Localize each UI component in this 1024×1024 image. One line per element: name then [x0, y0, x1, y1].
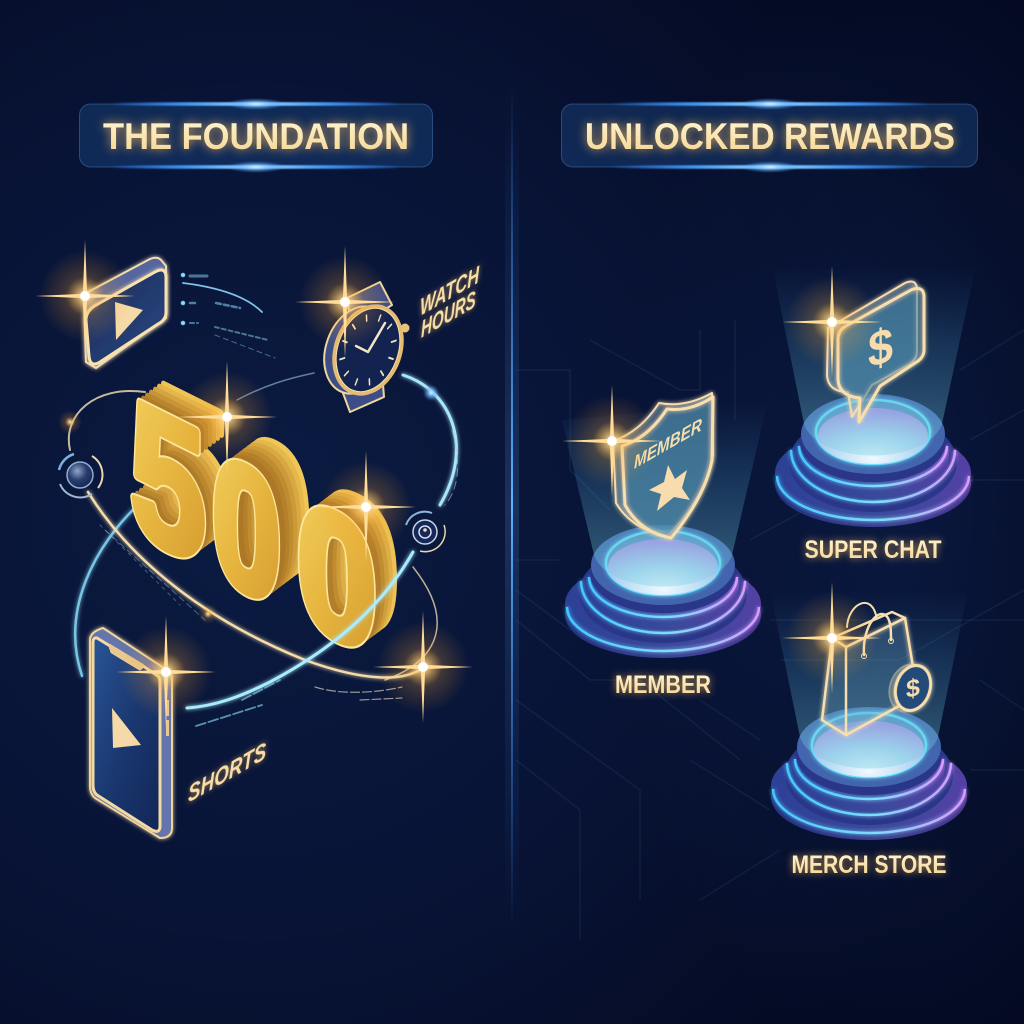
first digit 0: [212, 392, 311, 645]
orbit node: left: [59, 454, 102, 497]
digit 5: 5: [138, 351, 214, 602]
pedestal: super chat: [775, 394, 971, 527]
first digit 0: 0: [230, 401, 299, 632]
heading: the foundation: THE FOUNDATION: [103, 116, 409, 157]
label: super chat: SUPER CHAT: [804, 536, 942, 564]
label: watch hours: [420, 261, 480, 344]
label: merch store: MERCH STORE: [792, 851, 946, 879]
second digit 0: 0: [307, 452, 387, 687]
sparkles: foundation side: [35, 240, 473, 728]
icon: shield: [613, 393, 713, 538]
label: watch hours: WATCH: [420, 261, 480, 322]
second digit 0: 0: [297, 459, 377, 694]
icon: phone: [90, 628, 172, 838]
digit 5: 5: [154, 339, 230, 590]
orbit rings behind the number: [69, 373, 458, 680]
label: watch hours: HOURS: [421, 286, 476, 344]
icon: shopping bag: [822, 603, 936, 735]
dollar sign: $: [868, 317, 893, 379]
panel: super chat reward: [772, 265, 976, 564]
digit 5: 5: [130, 357, 206, 608]
orbit rings in front of the number: [88, 492, 424, 726]
digit 5: 5: [134, 354, 210, 605]
shield text: MEMBER: [634, 414, 702, 473]
second digit 0: 0: [311, 449, 391, 684]
heading: unlocked rewards: [562, 98, 978, 173]
light beam: member: [562, 400, 768, 587]
digit 5: 5: [142, 348, 218, 599]
icon: shopping bag: $: [906, 673, 920, 704]
heading: the foundation: [80, 98, 432, 173]
first digit 0: 0: [222, 407, 291, 638]
digit 5: 5: [146, 345, 222, 596]
gold number 500: [130, 339, 399, 694]
first digit 0: 0: [234, 398, 303, 629]
orbit node: right: [406, 512, 445, 552]
light beam: merch store: [770, 590, 968, 769]
heading: unlocked rewards: UNLOCKED REWARDS: [585, 116, 955, 157]
pedestal: merch store: [771, 707, 967, 840]
first digit 0: 0: [226, 404, 295, 635]
coin: [883, 660, 933, 716]
pedestal: member: [565, 525, 761, 658]
first digit 0: 0: [218, 410, 287, 641]
digit 5: 5: [150, 342, 226, 593]
icon: watch: [313, 282, 416, 412]
panel: merch store reward: [770, 582, 968, 879]
second digit 0: 0: [319, 443, 399, 678]
second digit 0: 0: [315, 446, 395, 681]
first digit 0: 0: [212, 414, 281, 645]
second digit 0: 0: [297, 459, 377, 694]
panel: member reward: [562, 385, 768, 699]
center divider: [505, 80, 519, 930]
first digit 0: 0: [212, 414, 281, 645]
light beam: super chat: [772, 265, 976, 456]
label: member: MEMBER: [615, 671, 711, 699]
circuit board pattern: [516, 320, 1024, 940]
label: shorts: SHORTS: [188, 737, 266, 809]
data streams beside play icon: [181, 273, 275, 358]
first digit 0: 0: [238, 395, 307, 626]
first digit 0: 0: [242, 392, 311, 623]
shield star: [649, 465, 690, 511]
second digit 0: 0: [303, 455, 383, 690]
digit 5: 5: [130, 357, 206, 608]
icon: speech bubble: [827, 282, 924, 422]
icon: video play tile: [84, 258, 166, 368]
